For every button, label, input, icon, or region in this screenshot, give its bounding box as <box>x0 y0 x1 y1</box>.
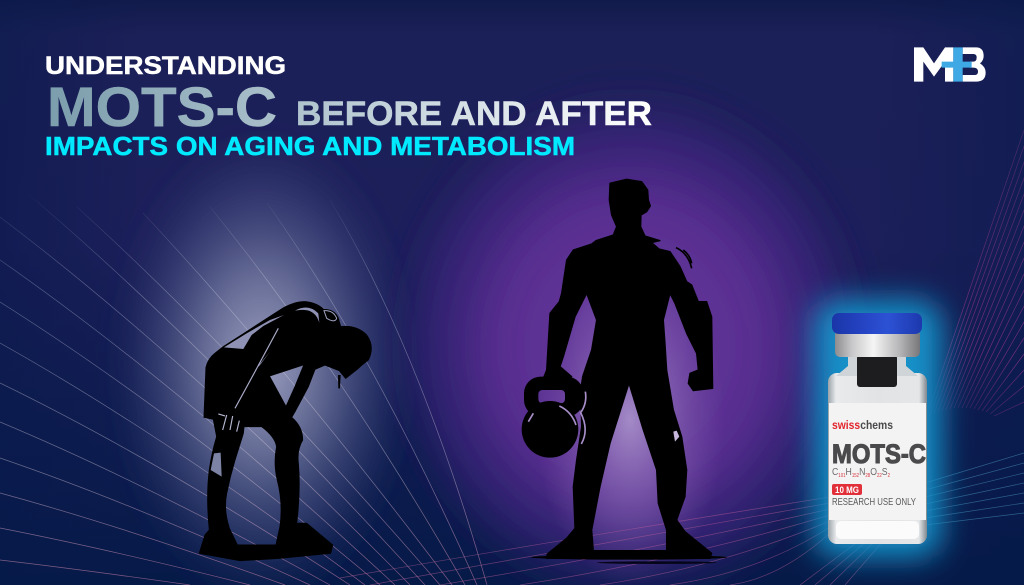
product name: MOTS-C <box>832 439 926 469</box>
blue cap <box>832 313 922 334</box>
vial body <box>828 373 927 544</box>
right cyan lines <box>925 453 1024 525</box>
formula: 152 <box>852 473 859 479</box>
formula: 101 <box>838 473 846 479</box>
brand: swisschems <box>832 418 893 432</box>
left curved line fan <box>0 193 487 585</box>
product vial <box>814 300 942 558</box>
powder <box>836 521 919 539</box>
formula: N <box>859 467 865 478</box>
rubber stopper <box>857 355 897 387</box>
metal crimp <box>835 330 920 357</box>
vial label <box>829 403 926 520</box>
glass neck <box>836 356 918 376</box>
heading line: MOTS-C before and after <box>47 75 652 138</box>
formula: 28 <box>865 473 870 479</box>
heading line: understanding: UNDERSTANDING <box>45 52 286 80</box>
ground shadow <box>531 555 727 560</box>
title <box>45 52 652 161</box>
formula: H <box>846 467 852 478</box>
disclaimer: RESEARCH USE ONLY <box>832 497 916 508</box>
formula: C <box>832 467 839 478</box>
formula: 2 <box>888 473 890 479</box>
knee highlight <box>211 453 222 477</box>
logo: M+B <box>914 47 986 82</box>
back highlights <box>224 315 284 349</box>
shoulder mark <box>676 248 692 268</box>
heading line: MOTS-C before and after: BEFORE AND AFTER <box>296 95 652 133</box>
figure: tired man bent over <box>199 302 371 561</box>
vial glow <box>814 300 942 558</box>
dose tag: 10 MG <box>835 485 859 496</box>
kettlebell highlights <box>528 392 586 444</box>
right line fan <box>926 130 1024 418</box>
formula: S <box>882 467 888 478</box>
sweat drip <box>338 375 341 388</box>
heading line: MOTS-C before and after: MOTS-C <box>47 75 277 138</box>
hand fingers <box>218 414 239 432</box>
formula: 22 <box>877 473 882 479</box>
formula: O <box>870 467 877 478</box>
figure: strong man with kettlebell <box>522 179 727 564</box>
subheading: IMPACTS ON AGING AND METABOLISM <box>45 131 575 161</box>
leg highlight <box>673 431 679 442</box>
bottom rising line fan <box>340 497 884 585</box>
kettlebell <box>522 377 583 458</box>
